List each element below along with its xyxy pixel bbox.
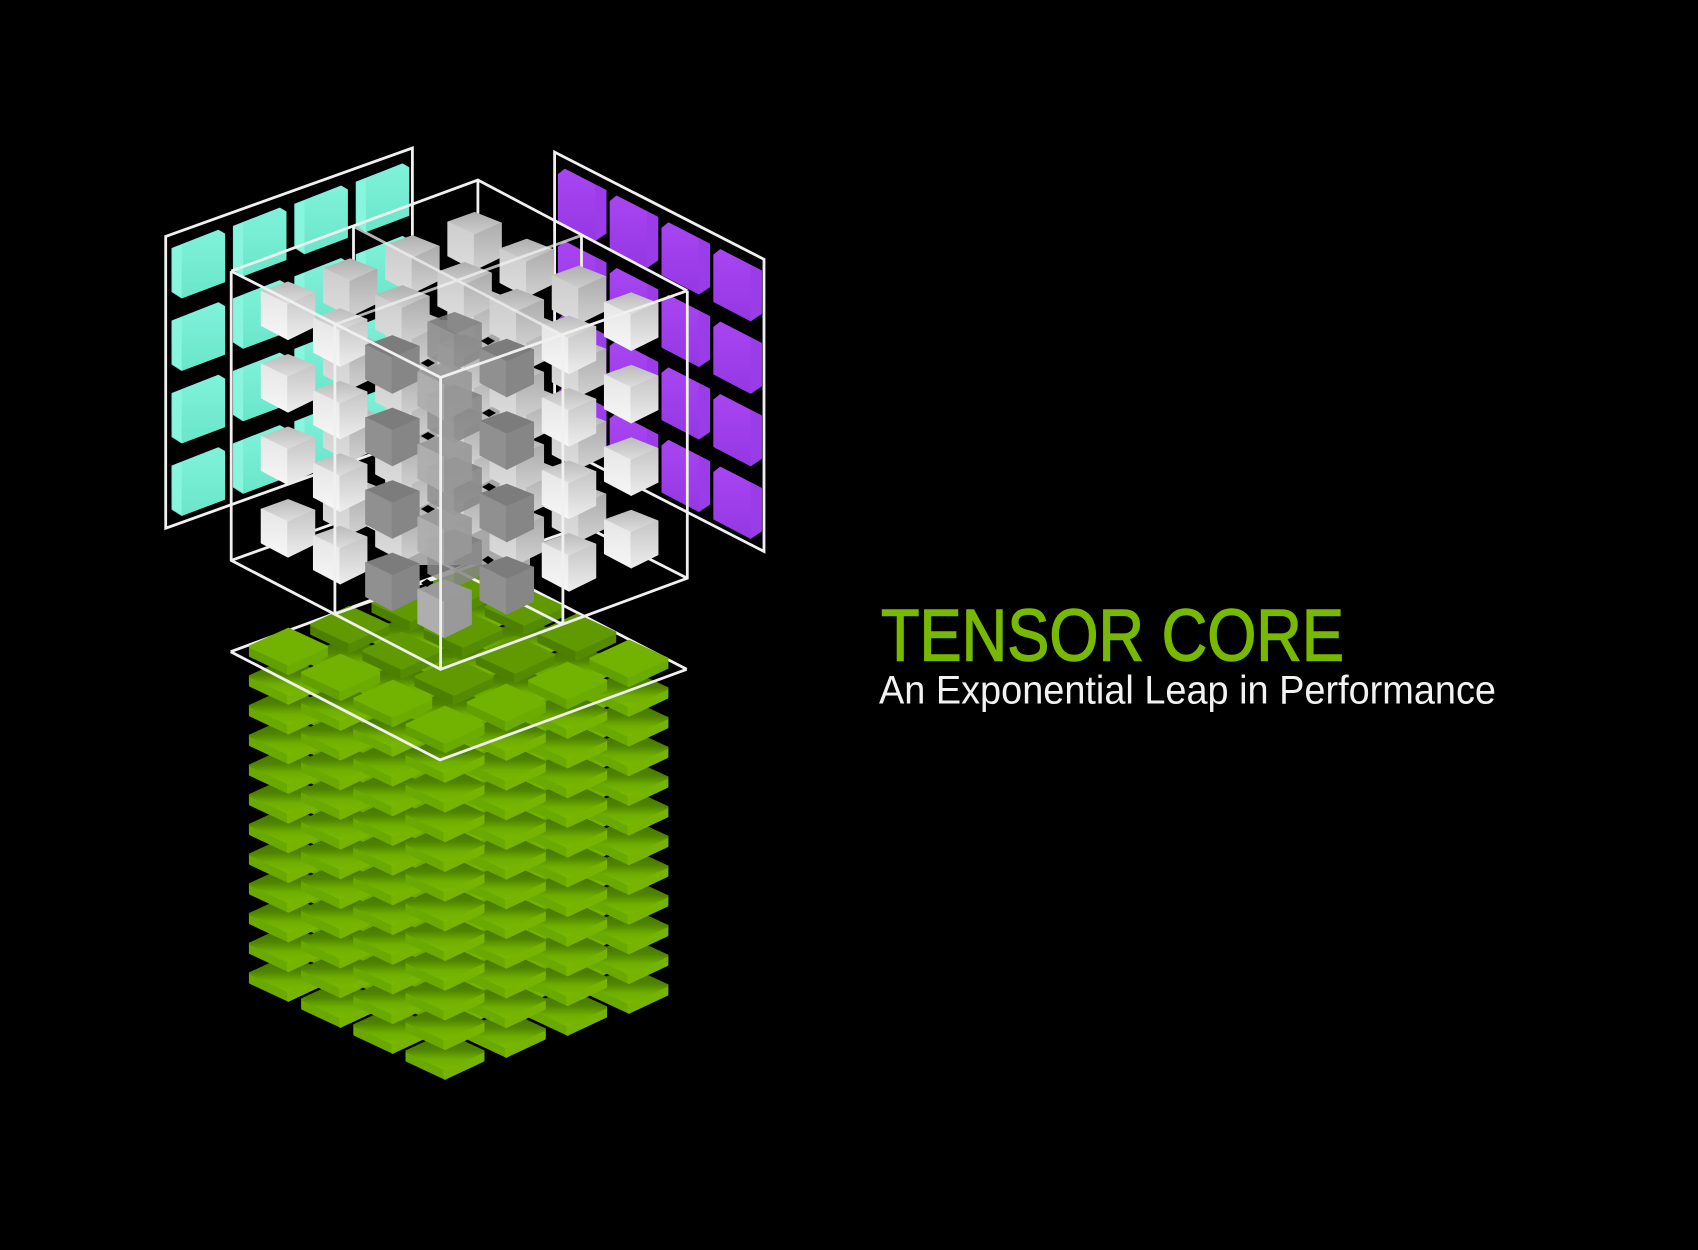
teal tile grid [172,164,408,515]
purple tile grid [559,170,761,538]
title: TENSOR CORE [881,596,1344,677]
chart: green tile stack [250,563,667,1078]
wireframe: floor slice lines over green [335,518,582,625]
green layer plane front edges [231,652,687,760]
panel: teal plane [166,148,412,528]
wireframe: slice lines across the top [335,226,582,335]
purple plane frame [555,152,764,551]
teal plane frame [166,148,412,528]
subtitle: An Exponential Leap in Performance [879,668,1496,712]
panel: purple plane [555,152,764,551]
wireframe: rear edges of cuboid [231,180,687,578]
cube grid: 4x4x4 white and grey cubes [262,213,658,637]
green layer plane rear edges [231,561,687,669]
wireframe: front edges of cuboid [231,271,687,669]
core filler behind the cube cluster [398,320,530,565]
